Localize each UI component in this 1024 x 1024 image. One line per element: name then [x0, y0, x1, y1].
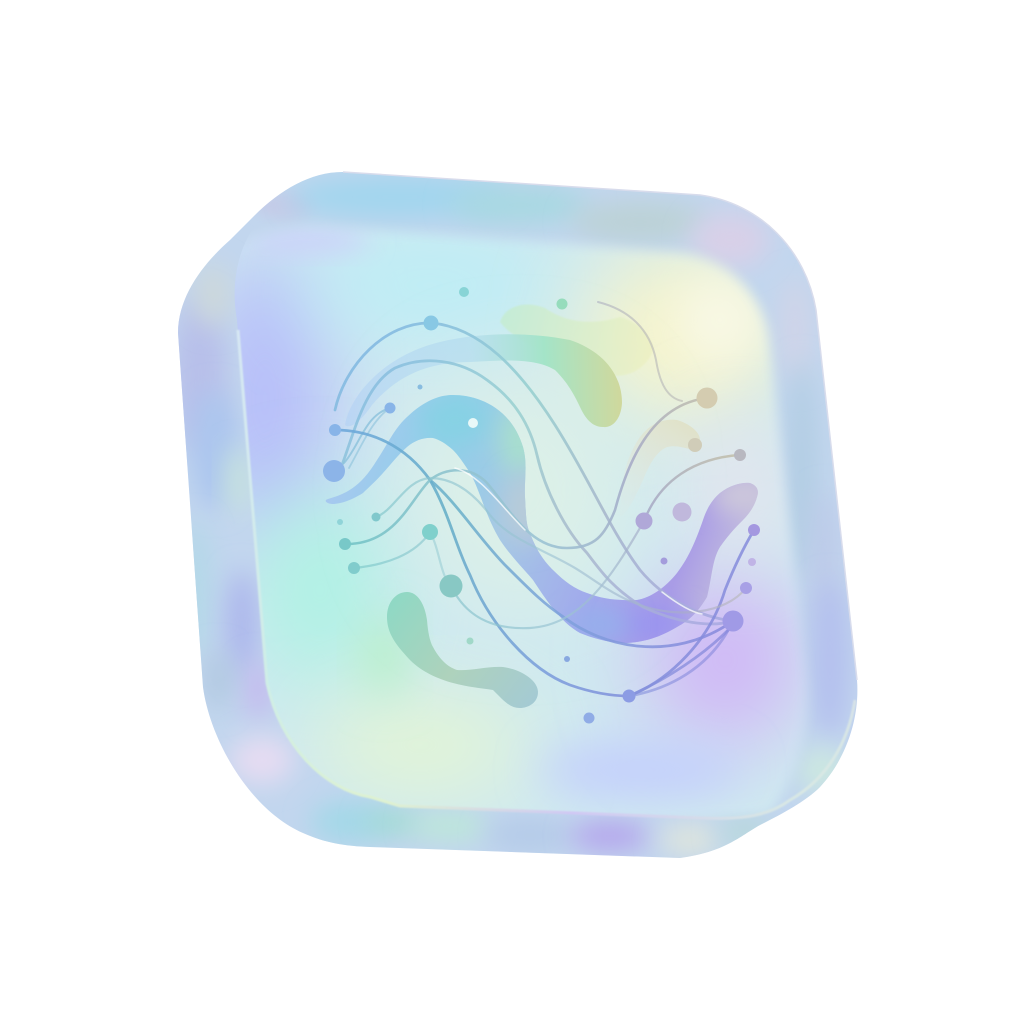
- glints: [455, 468, 702, 614]
- outer edge: [343, 172, 857, 680]
- curves: upper arcs: [335, 323, 733, 624]
- blob: green lower: [387, 592, 538, 708]
- front face: [234, 228, 807, 816]
- curves: lower sweep: [335, 430, 754, 696]
- blob: small right: [620, 420, 700, 517]
- blob: main wave: [326, 395, 758, 643]
- blob: top arc: [345, 334, 622, 427]
- nodes: [323, 287, 760, 724]
- front rim highlight: [238, 330, 855, 818]
- tile body: side wall and bevels: [170, 165, 870, 865]
- curves: teal and grey: [345, 302, 746, 628]
- glass tile: [170, 165, 870, 865]
- network lines: [335, 302, 754, 696]
- blob: pale top: [500, 304, 653, 376]
